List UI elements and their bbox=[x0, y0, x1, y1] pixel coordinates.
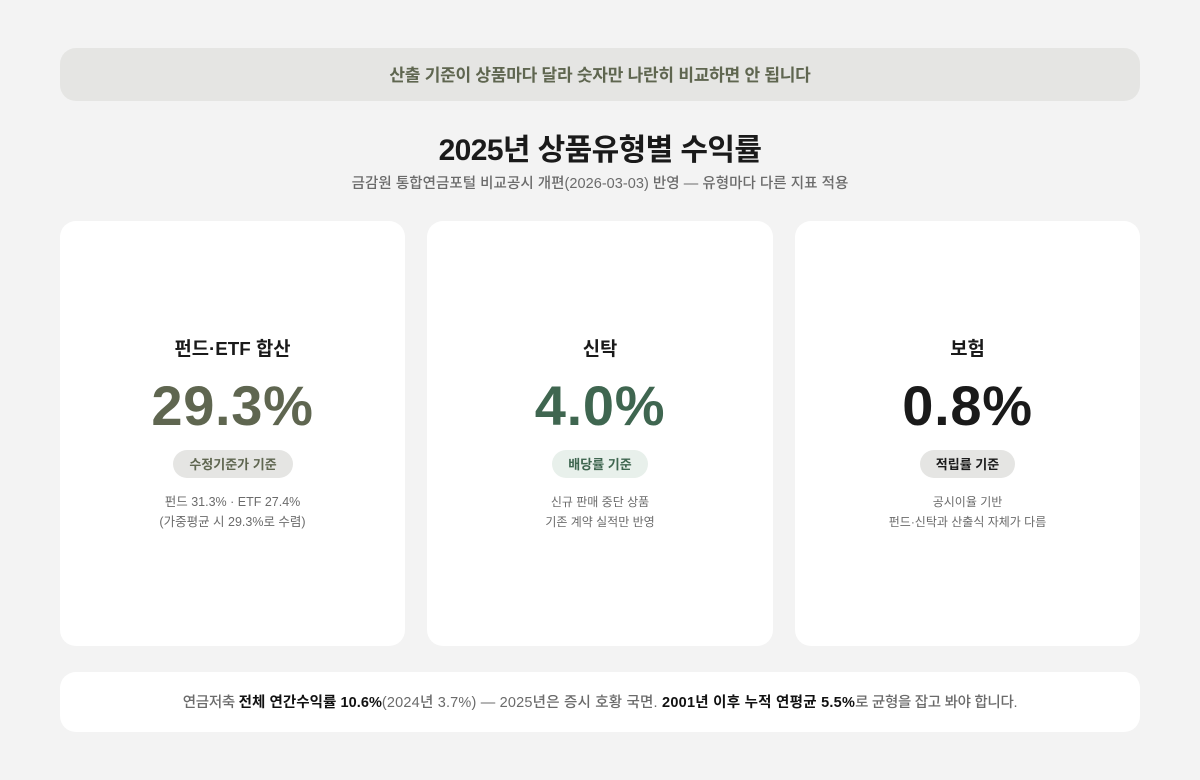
panel: fund and ETF bbox=[60, 221, 405, 646]
note: fund and ETF detail bbox=[159, 495, 306, 529]
badge: accumulation rate basis: 적립률 기준 bbox=[936, 457, 999, 472]
footer callout: overall return bbox=[60, 672, 1140, 732]
note: insurance detail bbox=[889, 495, 1046, 529]
badge: dividend rate basis bbox=[552, 450, 648, 478]
note: fund and ETF detail: 펀드 31.3% · ETF 27.4% bbox=[165, 495, 300, 509]
big number: 0.8%: 0.8% bbox=[902, 374, 1033, 437]
subtitle: 금감원 통합연금포털 비교공시 개편(2026-03-03) 반영 — 유형마다 다른 지표 적용 bbox=[352, 176, 848, 192]
note: insurance detail: 공시이율 기반 bbox=[933, 495, 1002, 509]
badge: NAV basis: 수정기준가 기준 bbox=[189, 457, 277, 472]
note: trust detail: 신규 판매 중단 상품 bbox=[551, 495, 649, 509]
note: trust detail bbox=[545, 495, 655, 529]
note: trust detail: 기존 계약 실적만 반영 bbox=[545, 515, 655, 529]
note: fund and ETF detail: (가중평균 시 29.3%로 수렴) bbox=[159, 515, 306, 529]
panel: trust bbox=[427, 221, 773, 646]
top banner: warning message: 산출 기준이 상품마다 달라 숫자만 나란히 비교하면 안 됩니다 bbox=[389, 66, 811, 85]
panel: insurance bbox=[795, 221, 1140, 646]
big number: 4.0%: 4.0% bbox=[535, 374, 665, 437]
footer callout: overall return: 연금저축 전체 연간수익률 10.6%(2024년 3.7%) — 2025년은 증시 호황 국면. 2001년 이후 누적 연평균 5.5%로 균형을 잡고 봐야 합니다. bbox=[183, 695, 1017, 711]
card heading: fund and ETF: 펀드·ETF 합산 bbox=[174, 338, 291, 359]
title: 2025년 상품유형별 수익률 bbox=[439, 134, 761, 167]
card heading: trust: 신탁 bbox=[583, 338, 617, 359]
badge: accumulation rate basis bbox=[920, 450, 1015, 478]
top banner: warning message bbox=[60, 48, 1140, 101]
note: insurance detail: 펀드·신탁과 산출식 자체가 다름 bbox=[889, 515, 1046, 529]
badge: NAV basis bbox=[173, 450, 293, 478]
badge: dividend rate basis: 배당률 기준 bbox=[568, 457, 632, 472]
big number: 29.3%: 29.3% bbox=[151, 374, 314, 437]
card heading: insurance: 보험 bbox=[950, 338, 985, 359]
